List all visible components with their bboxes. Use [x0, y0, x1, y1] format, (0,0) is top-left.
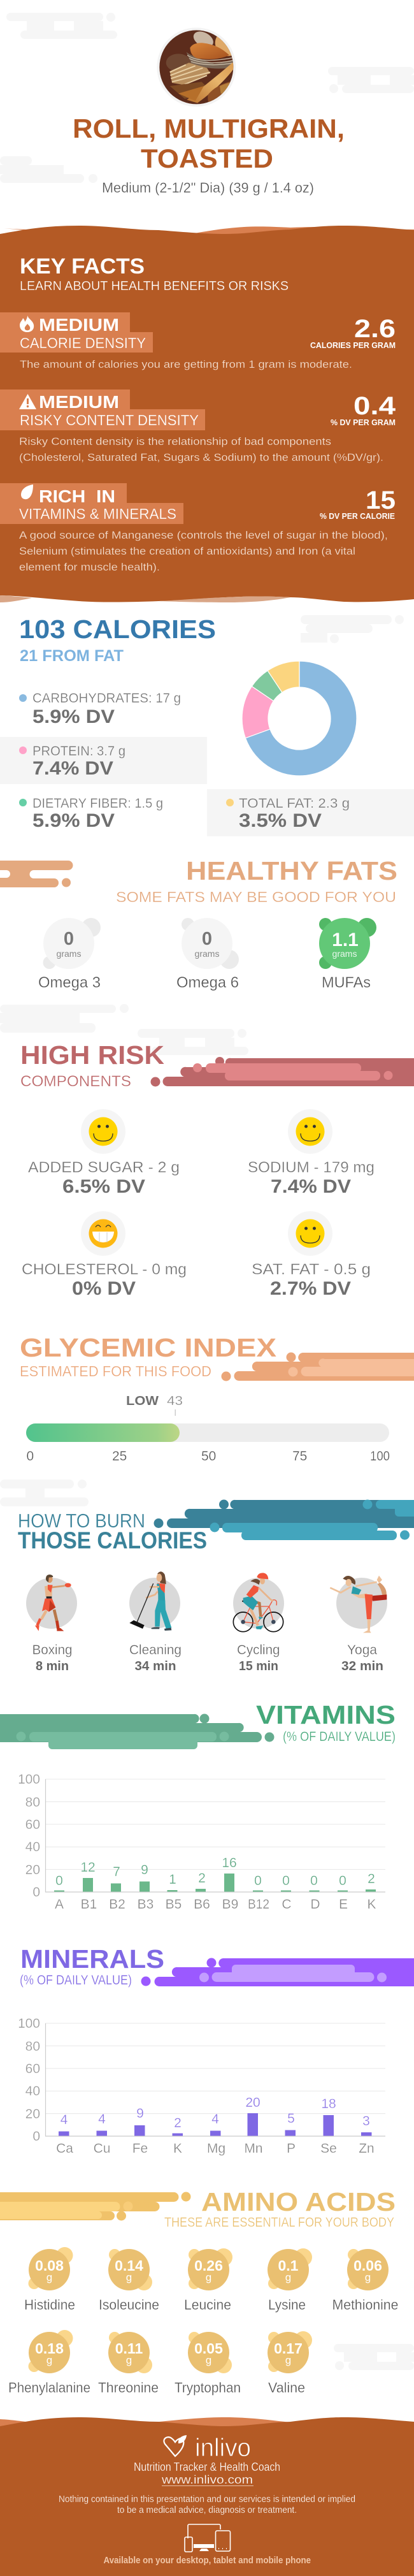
amino acid: methionine: [332, 2249, 399, 2313]
banner: glycemic ribbon: [222, 1353, 414, 1381]
stat: omega 3: grams: [57, 949, 81, 959]
amino acid: leucine: [184, 2248, 232, 2313]
heading: minerals: (% OF DAILY VALUE): [20, 1973, 132, 1988]
fact: risky content density: % DV PER GRAM: [331, 418, 396, 427]
fact: risky content density: (Cholesterol, Saturated Fat, Sugars & Sodium) to the amount (%DV/gr).: [19, 451, 383, 463]
fact: calorie density: CALORIES PER GRAM: [310, 340, 396, 350]
amino acid: threonine: Threonine: [98, 2380, 159, 2396]
stat: omega 6: 0: [202, 929, 212, 949]
heading: high risk: HIGH RISK: [20, 1040, 164, 1070]
heading: calories: 21 FROM FAT: [20, 647, 124, 665]
macro: total fat: 3.5% DV: [239, 810, 322, 831]
bar chart: vitamins: B6: [194, 1897, 210, 1912]
heading: minerals: [20, 1944, 164, 1988]
risk item: added sugar: [28, 1109, 180, 1197]
gauge: glycemic index value: 75: [292, 1449, 307, 1464]
activity labels: [32, 1643, 383, 1673]
macro: protein: [0, 737, 207, 784]
risk item: cholesterol: CHOLESTEROL - 0 mg: [22, 1261, 187, 1278]
gauge: glycemic index value: LOW: [126, 1394, 159, 1408]
activity labels: Cleaning: [129, 1643, 182, 1657]
fact: risky content density: 0.4: [353, 392, 396, 420]
amino acid: tryptophan: Tryptophan: [175, 2380, 241, 2396]
heading: calories: 103 CALORIES: [19, 615, 216, 644]
amino acid: tryptophan: 0.05: [194, 2340, 223, 2357]
risk item: cholesterol: [22, 1211, 187, 1299]
amino acid: methionine: Methionine: [332, 2297, 399, 2313]
risk item: added sugar: 6.5% DV: [62, 1176, 145, 1197]
bar chart: vitamins: 12: [80, 1860, 96, 1875]
activity labels: 15 min: [239, 1659, 278, 1673]
bar chart: vitamins: 9: [141, 1863, 148, 1877]
risk item: added sugar: ADDED SUGAR - 2 g: [28, 1159, 180, 1176]
bar chart: vitamins: C: [282, 1897, 292, 1912]
activity labels: 8 min: [36, 1659, 69, 1673]
bar chart: vitamins: 0: [55, 1874, 63, 1888]
macro: protein: PROTEIN: 3.7 g: [32, 744, 125, 759]
bar chart: vitamins: 1: [169, 1872, 176, 1887]
activity labels: 34 min: [135, 1659, 176, 1673]
gauge: glycemic index value: 100: [370, 1449, 390, 1464]
bar chart: minerals: 80: [25, 2039, 40, 2054]
fact: calorie density: 2.6: [354, 315, 396, 343]
stat: omega 6: grams: [195, 949, 219, 959]
gauge: glycemic index value: 43: [167, 1394, 183, 1408]
bar chart: minerals: 60: [25, 2062, 40, 2076]
amino acid: tryptophan: [175, 2332, 241, 2396]
bar chart: vitamins: B5: [166, 1897, 182, 1912]
bar chart: minerals: Fe: [132, 2141, 148, 2156]
amino acid: phenylalanine: g: [46, 2354, 52, 2366]
amino acid: valine: g: [285, 2354, 291, 2366]
activity: cleaning: [129, 1571, 180, 1631]
bar chart: minerals: Mg: [207, 2141, 225, 2156]
banner: amino acids ribbon: [0, 2192, 191, 2221]
heading: calories: [19, 615, 216, 665]
bar chart: minerals: 4: [61, 2113, 68, 2127]
fact: rich in vitamins and minerals: Selenium (stimulates the creation of antioxidants) and Iron (a vital: [19, 545, 355, 557]
fact: rich in vitamins and minerals: element for muscle health).: [19, 561, 160, 573]
bar chart: minerals: K: [173, 2141, 182, 2156]
title: [73, 113, 345, 173]
banner: healthy fats ribbon: [0, 861, 73, 887]
stat: omega 3: [38, 918, 101, 991]
bar chart: vitamins: 0: [32, 1885, 40, 1900]
macro: carbohydrates: [19, 691, 181, 727]
heading: healthy fats: [116, 856, 397, 905]
title: ROLL, MULTIGRAIN,: [73, 113, 345, 143]
bar chart: minerals: 4: [211, 2112, 219, 2127]
amino acid: lysine: Lysine: [268, 2297, 306, 2313]
serving size subtitle: Medium (2-1/2" Dia) (39 g / 1.4 oz): [102, 180, 314, 196]
disclaimer: Nothing contained in this presentation and our services is intended or implied: [59, 2494, 355, 2505]
heading: KEY FACTS: [20, 254, 145, 279]
bar chart: vitamins: 7: [113, 1865, 120, 1879]
tagline and website: www.inlivo.com: [161, 2473, 253, 2486]
macro: total fat: TOTAL FAT: 2.3 g: [239, 796, 350, 811]
bar chart: vitamins: 60: [25, 1817, 40, 1832]
fact: calorie density: CALORIE DENSITY: [20, 335, 146, 351]
bar chart: minerals: 100: [18, 2016, 40, 2031]
amino acid: methionine: g: [365, 2271, 371, 2283]
risk item: saturated fat: SAT. FAT - 0.5 g: [252, 1261, 371, 1278]
bar chart: vitamins: 2: [198, 1871, 206, 1886]
macro: carbohydrates: CARBOHYDRATES: 17 g: [32, 691, 181, 706]
banner: burn ribbon: [154, 1499, 414, 1540]
stat: MUFAs: [319, 918, 376, 991]
heading: minerals: MINERALS: [20, 1944, 164, 1974]
heading: high risk: COMPONENTS: [20, 1073, 131, 1090]
logo: inlivo: [164, 2434, 251, 2462]
bar chart: vitamins: K: [367, 1897, 376, 1912]
food photo: bread basket: [157, 28, 236, 107]
bar chart: minerals: Ca: [56, 2141, 73, 2156]
amino acid: lysine: g: [285, 2271, 291, 2283]
gauge: glycemic index value: [26, 1394, 390, 1464]
bar chart: vitamins: 40: [25, 1840, 40, 1854]
bar chart: minerals: P: [287, 2141, 296, 2156]
bar chart: minerals: 3: [362, 2114, 370, 2128]
risk item: saturated fat: [252, 1211, 371, 1299]
stat: omega 3: 0: [64, 929, 74, 949]
amino acid: leucine: Leucine: [184, 2297, 231, 2313]
bar chart: vitamins: D: [310, 1897, 320, 1912]
amino acid: phenylalanine: 0.18: [35, 2340, 64, 2357]
amino acid: isoleucine: Isoleucine: [99, 2297, 159, 2313]
heading: how to burn those calories: HOW TO BURN: [18, 1510, 145, 1532]
heading: glycemic index: [20, 1333, 276, 1379]
amino acid: tryptophan: g: [206, 2354, 211, 2366]
amino acid: isoleucine: 0.14: [115, 2257, 143, 2274]
fact: rich in vitamins and minerals: RICH IN: [39, 486, 115, 506]
banner: vitamins ribbon: [0, 1714, 274, 1749]
fact: calorie density: The amount of calories you are getting from 1 gram is moderate.: [20, 358, 352, 370]
heading: healthy fats: HEALTHY FATS: [186, 856, 397, 885]
bar chart: minerals: Se: [320, 2141, 337, 2156]
risk item: sodium: SODIUM - 179 mg: [248, 1159, 375, 1176]
bar chart: vitamins: 0: [310, 1874, 318, 1888]
disclaimer: [59, 2494, 355, 2515]
macro: total fat: [207, 789, 414, 836]
bar chart: minerals: 40: [25, 2084, 40, 2099]
amino acid: valine: Valine: [268, 2380, 305, 2396]
bar chart: vitamins: B1: [81, 1897, 97, 1912]
macro: dietary fiber: [19, 796, 163, 831]
risk item: cholesterol: 0% DV: [72, 1278, 136, 1299]
heading: how to burn those calories: [18, 1510, 207, 1554]
amino acid: phenylalanine: [8, 2330, 90, 2396]
amino acid: valine: 0.17: [274, 2340, 303, 2357]
tagline and website: Nutrition Tracker & Health Coach: [134, 2461, 280, 2473]
stat: MUFAs: 1.1: [332, 929, 359, 950]
fact: rich in vitamins and minerals: % DV PER CALORIE: [320, 511, 395, 521]
bar chart: minerals: 18: [321, 2097, 336, 2111]
amino acid: isoleucine: [99, 2249, 159, 2313]
fact: risky content density: Risky Content density is the relationship of bad components: [19, 435, 331, 448]
heading: high risk: [20, 1040, 164, 1090]
panel: key facts: [0, 226, 414, 602]
amino acid: isoleucine: g: [126, 2271, 132, 2283]
bar chart: minerals: 20: [245, 2095, 261, 2110]
activity: boxing: [26, 1575, 77, 1631]
bar chart: minerals: Mn: [244, 2141, 263, 2156]
amino acid: methionine: 0.06: [353, 2257, 382, 2274]
amino acid: histidine: g: [46, 2271, 52, 2283]
bar chart: vitamins: B12: [248, 1897, 269, 1912]
risk item: sodium: 7.4% DV: [271, 1176, 351, 1197]
bar chart: vitamins: 0: [339, 1874, 346, 1888]
amino acid: lysine: 0.1: [278, 2257, 299, 2274]
disclaimer: to be a medical advice, diagnosis or treatment.: [117, 2505, 297, 2515]
bar chart: vitamins: E: [339, 1897, 348, 1912]
bar chart: vitamins: 0: [254, 1874, 262, 1888]
amino acid: threonine: [98, 2332, 159, 2396]
donut chart: calorie breakdown: [242, 661, 357, 776]
gauge: glycemic index value: 50: [201, 1449, 216, 1464]
activity labels: Boxing: [32, 1643, 73, 1657]
heading: glycemic index: GLYCEMIC INDEX: [20, 1333, 276, 1362]
bar chart: vitamins: 16: [222, 1856, 237, 1870]
activity labels: 32 min: [341, 1659, 383, 1673]
macro: dietary fiber: DIETARY FIBER: 1.5 g: [32, 796, 163, 811]
banner: high risk ribbon: [150, 1057, 414, 1086]
fact: rich in vitamins and minerals: A good source of Manganese (controls the level of sugar in the blood),: [19, 529, 388, 541]
amino acid: phenylalanine: Phenylalanine: [8, 2380, 90, 2396]
macro: carbohydrates: 5.9% DV: [32, 706, 115, 727]
amino acid: leucine: 0.26: [194, 2257, 223, 2274]
stat: omega 6: Omega 6: [176, 974, 239, 991]
bar chart: vitamins: B9: [222, 1897, 238, 1912]
heading: how to burn those calories: THOSE CALORIES: [18, 1527, 207, 1554]
heading: amino acids: AMINO ACIDS: [201, 2187, 396, 2216]
fact: risky content density: [0, 389, 396, 463]
bar chart: vitamins: A: [55, 1897, 64, 1912]
bar chart: minerals: 20: [25, 2107, 40, 2121]
bar chart: minerals: 9: [136, 2106, 144, 2121]
bar chart: vitamins: [18, 1772, 385, 1912]
heading: LEARN ABOUT HEALTH BENEFITS OR RISKS: [20, 279, 289, 293]
availability note: Available on your desktop, tablet and mobile phone: [103, 2555, 311, 2566]
gauge: glycemic index value: 25: [112, 1449, 127, 1464]
fact: rich in vitamins and minerals: 15: [366, 486, 396, 514]
activity labels: Yoga: [347, 1643, 377, 1657]
bar chart: vitamins: 2: [368, 1872, 375, 1886]
bar chart: minerals: Cu: [94, 2141, 110, 2156]
amino acid: threonine: g: [126, 2354, 132, 2366]
amino acid: valine: [268, 2331, 312, 2396]
macro: dietary fiber: 5.9% DV: [32, 810, 115, 831]
amino acid: histidine: Histidine: [24, 2297, 75, 2313]
stat: MUFAs: grams: [332, 949, 357, 959]
fact: risky content density: MEDIUM: [39, 392, 119, 412]
heading: healthy fats: SOME FATS MAY BE GOOD FOR YOU: [116, 889, 396, 905]
amino acid: leucine: g: [206, 2271, 211, 2283]
gauge: glycemic index value: 0: [27, 1449, 34, 1464]
activity: yoga: [330, 1576, 387, 1633]
bar chart: minerals: 0: [32, 2129, 40, 2144]
fact: calorie density: [0, 312, 396, 370]
bar chart: vitamins: B3: [138, 1897, 153, 1912]
amino acid: histidine: 0.08: [35, 2257, 64, 2274]
tagline and website: [134, 2461, 280, 2486]
bar chart: minerals: Zn: [359, 2141, 375, 2156]
amino acid: lysine: [268, 2248, 312, 2313]
heading: vitamins: (% OF DAILY VALUE): [283, 1729, 396, 1744]
bar chart: vitamins: 20: [25, 1863, 40, 1877]
risk item: sodium: [248, 1109, 375, 1197]
bar chart: vitamins: 80: [25, 1795, 40, 1810]
icon: devices: [185, 2524, 231, 2552]
macro: protein: 7.4% DV: [32, 758, 113, 779]
risk item: saturated fat: 2.7% DV: [270, 1278, 351, 1299]
bar chart: minerals: [18, 2016, 385, 2156]
heading: vitamins: [256, 1700, 396, 1744]
amino acid: threonine: 0.11: [115, 2340, 143, 2357]
amino acid: histidine: [24, 2247, 75, 2313]
heading: [20, 254, 289, 293]
bar chart: minerals: 5: [287, 2111, 295, 2126]
fact: calorie density: MEDIUM: [39, 315, 119, 335]
fact: risky content density: RISKY CONTENT DENSITY: [20, 412, 199, 428]
title: TOASTED: [141, 143, 273, 173]
fact: rich in vitamins and minerals: [0, 483, 396, 573]
panel: footer: [0, 2417, 414, 2576]
stat: MUFAs: MUFAs: [322, 974, 371, 991]
bar chart: vitamins: 100: [18, 1772, 40, 1787]
stat: omega 3: Omega 3: [38, 974, 101, 991]
bar chart: minerals: 2: [174, 2116, 182, 2130]
activity: cycling: [233, 1573, 284, 1632]
stat: omega 6: [176, 918, 239, 991]
bar chart: minerals: 4: [98, 2112, 106, 2127]
heading: amino acids: [164, 2187, 396, 2230]
activity labels: Cycling: [237, 1643, 280, 1657]
bar chart: vitamins: 0: [282, 1874, 290, 1888]
heading: vitamins: VITAMINS: [256, 1700, 396, 1729]
bar chart: vitamins: B2: [109, 1897, 125, 1912]
banner: minerals ribbon: [141, 1958, 414, 1986]
logo: inlivo: inlivo: [195, 2434, 251, 2462]
fact: rich in vitamins and minerals: VITAMINS & MINERALS: [19, 506, 176, 522]
heading: glycemic index: ESTIMATED FOR THIS FOOD: [20, 1363, 211, 1379]
